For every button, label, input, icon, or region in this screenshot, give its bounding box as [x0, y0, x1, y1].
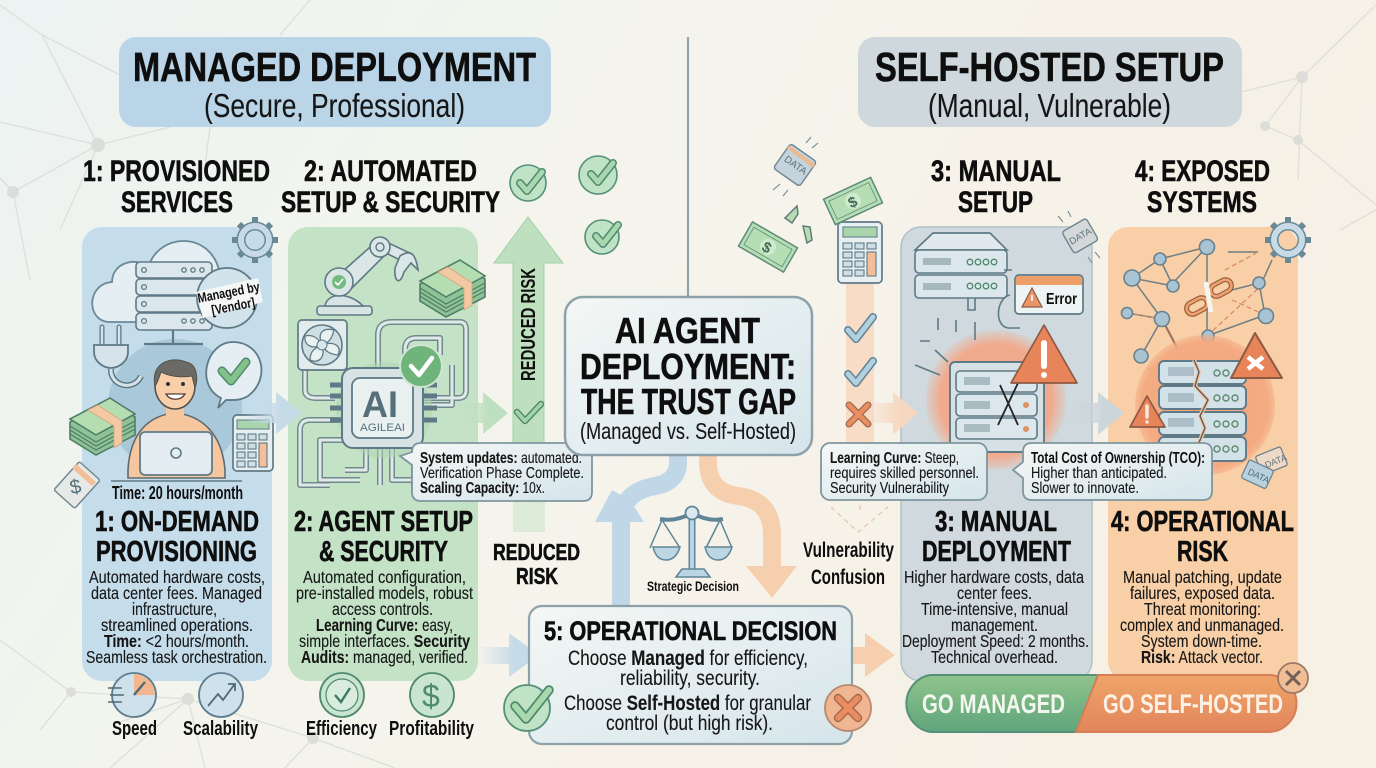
panel body text: pre-installed models, robust	[296, 583, 473, 603]
right header: self-hosted setup: SELF-HOSTED SETUP	[875, 44, 1224, 90]
callout: total cost of ownership	[1013, 443, 1212, 500]
dashed warning marks	[831, 505, 888, 532]
panel body text: infrastructure,	[132, 599, 217, 619]
panel body text: center fees.	[957, 583, 1032, 603]
curved arrow: to self-hosted	[708, 452, 797, 598]
icon: close cross	[1278, 663, 1308, 693]
badge: managed by vendor	[196, 268, 263, 328]
panel heading: operational risk	[1111, 506, 1294, 568]
panel heading: agent setup and security: 2: AGENT SETUP	[294, 506, 473, 538]
column heading 1	[83, 155, 270, 219]
panel body text: data center fees. Managed	[91, 583, 262, 603]
column heading 3: SETUP	[958, 186, 1033, 219]
label: vulnerability and confusion: Confusion	[811, 566, 885, 589]
icon: cash stack	[70, 398, 135, 455]
panel body text: Learning Curve: easy,	[316, 615, 453, 635]
column heading 1: 1: PROVISIONED	[83, 155, 270, 188]
label: reduced risk	[493, 539, 580, 589]
box: operational decision: reliability, security.	[620, 667, 760, 690]
box: operational decision: Choose Self-Hosted for granular	[564, 692, 811, 715]
callout: learning curve: requires skilled personnel.	[830, 465, 979, 482]
panel: operational risk	[1108, 217, 1311, 681]
column heading 3	[931, 155, 1061, 219]
icon: broken data chips: DATA	[1246, 467, 1271, 485]
icon: orange cross	[825, 685, 871, 731]
panel: agent setup and security	[288, 227, 485, 681]
panel heading: on-demand provisioning: 1: ON-DEMAND	[95, 506, 259, 538]
icon: speech bubble check	[206, 342, 261, 408]
panel body text: Manual patching, update	[1123, 567, 1282, 587]
panel body text	[902, 567, 1089, 667]
curved arrow: to managed	[595, 452, 678, 606]
illustration: cloud and server rack	[92, 241, 237, 344]
icon: calculator	[233, 415, 273, 471]
panel heading: on-demand provisioning: PROVISIONING	[96, 536, 257, 568]
box: operational decision: Choose Managed for efficiency,	[568, 647, 808, 670]
callout: system updates	[400, 443, 592, 501]
callout: total cost of ownership: Total Cost of Ownership (TCO):	[1031, 450, 1205, 467]
icon: gear	[1265, 217, 1311, 263]
callout: total cost of ownership: Slower to innovate.	[1031, 480, 1139, 497]
column heading 4: SYSTEMS	[1147, 186, 1257, 219]
panel body text: System down-time.	[1141, 631, 1262, 651]
panel body text: Seamless task orchestration.	[86, 647, 267, 667]
arrow: provisioning to setup	[245, 392, 302, 434]
panel heading: agent setup and security	[294, 506, 473, 568]
arrow: reduced risk rising: REDUCED RISK	[518, 268, 540, 381]
panel body text: Higher hardware costs, data	[904, 567, 1084, 587]
illustration: server with error	[915, 233, 1020, 328]
panel body text: Automated configuration,	[303, 567, 466, 587]
callout: learning curve	[821, 443, 987, 500]
left header: managed deployment: MANAGED DEPLOYMENT	[133, 44, 536, 90]
label: reduced risk: RISK	[516, 563, 558, 589]
callout: system updates: System updates: automated.	[420, 450, 582, 467]
panel body text	[1120, 567, 1284, 667]
box: operational decision	[504, 606, 871, 744]
callout: total cost of ownership: Higher than anticipated.	[1031, 465, 1167, 482]
arrow: setup to reduced risk	[455, 392, 508, 434]
panel heading: agent setup and security: & SECURITY	[319, 536, 448, 568]
center title box: THE TRUST GAP	[581, 381, 796, 422]
error window: Error	[1046, 291, 1077, 308]
icon: broken data chips: DATA	[1263, 452, 1288, 470]
arrow: into manual setup	[872, 392, 918, 435]
metric: profitability	[389, 673, 475, 740]
icon: cooling fan	[298, 320, 347, 370]
icons: verified checks	[510, 156, 619, 254]
panel body text	[296, 567, 473, 667]
label: vulnerability and confusion	[803, 539, 894, 589]
arrow: decision to self-hosted	[850, 633, 895, 677]
callout: system updates: Scaling Capacity: 10x.	[420, 480, 545, 497]
panel body text: Technical overhead.	[931, 647, 1058, 667]
panel heading: operational risk: RISK	[1177, 536, 1228, 568]
caption: time per month: Time: 20 hours/month	[112, 483, 243, 503]
icon: scales of justice	[650, 506, 732, 577]
icon: dollar bill: $	[846, 193, 861, 212]
icon: AI chip	[330, 345, 442, 448]
arrow: manual to exposed	[1070, 392, 1124, 435]
icon: broken data chips	[1241, 446, 1288, 489]
icon: data chip: DATA	[782, 154, 809, 178]
panel: on-demand provisioning	[54, 217, 278, 681]
center title box: (Managed vs. Self-Hosted)	[580, 418, 796, 444]
center title box: AI AGENT	[615, 310, 760, 351]
panel body text: Audits: managed, verified.	[301, 647, 468, 667]
icon: dollar bill: $	[759, 238, 775, 258]
illustration: circuit traces	[300, 322, 466, 490]
label: strategic decision: Strategic Decision	[647, 578, 739, 594]
icon: calculator	[838, 222, 882, 283]
button: go managed or self-hosted: GO SELF-HOSTED	[1103, 689, 1283, 719]
button: go managed or self-hosted	[906, 663, 1308, 732]
column heading 4	[1135, 155, 1270, 219]
callout: system updates: Verification Phase Complete.	[420, 465, 584, 482]
icon: torn bill scraps	[785, 206, 812, 243]
panel heading: operational risk: 4: OPERATIONAL	[1111, 506, 1294, 538]
metric: speed: Speed	[112, 718, 157, 740]
right header: self-hosted setup	[858, 37, 1242, 127]
panel heading: manual deployment	[922, 506, 1071, 568]
metric: profitability: Profitability	[389, 718, 475, 740]
column heading 3: 3: MANUAL	[931, 155, 1061, 188]
panel body text	[86, 567, 267, 667]
panel heading: manual deployment: DEPLOYMENT	[922, 536, 1071, 568]
icon: data chip	[1058, 211, 1100, 263]
cracked server with warnings	[1130, 333, 1282, 475]
panel body text: failures, exposed data.	[1130, 583, 1275, 603]
panel body text: access controls.	[332, 599, 433, 619]
panel body text: Automated hardware costs,	[89, 567, 265, 587]
metric: scalability	[183, 673, 259, 740]
column heading 2	[281, 155, 500, 219]
center title box	[565, 297, 812, 455]
icon: data chip	[773, 137, 818, 196]
label: reduced risk: REDUCED	[493, 539, 580, 565]
icon: robot arm	[317, 237, 418, 315]
icon: dollar bill	[738, 222, 798, 272]
icon: dollar bill	[824, 177, 882, 225]
icon: AI chip: AGILEAI	[360, 422, 405, 434]
panel body text: Threat monitoring:	[1144, 599, 1261, 619]
icon: green check	[504, 685, 550, 731]
panel body text: Time: <2 hours/month.	[104, 631, 249, 651]
icon: torn receipt: $	[68, 475, 83, 499]
arrow: reduced risk rising	[494, 217, 563, 532]
panel body text: simple interfaces. Security	[299, 631, 470, 651]
icon: torn receipt	[54, 462, 100, 508]
column heading 2: SETUP & SECURITY	[281, 186, 500, 219]
panel heading: manual deployment: 3: MANUAL	[935, 506, 1057, 538]
icon: cash stack	[420, 260, 485, 317]
error window	[1015, 275, 1083, 314]
left header: managed deployment: (Secure, Professional)	[204, 87, 465, 124]
left header: managed deployment	[119, 37, 551, 127]
callout: learning curve: Security Vulnerability	[830, 480, 949, 497]
icon: gear	[232, 217, 278, 263]
panel heading: on-demand provisioning	[95, 506, 259, 568]
column heading 1: SERVICES	[121, 186, 233, 219]
badge: managed by vendor: Managed by	[196, 279, 261, 306]
column heading 4: 4: EXPOSED	[1135, 155, 1270, 188]
column heading 2: 2: AUTOMATED	[304, 155, 477, 188]
right decoration stripe with checks	[846, 283, 874, 443]
panel body text: complex and unmanaged.	[1120, 615, 1284, 635]
illustration: person at laptop	[111, 360, 242, 481]
label: vulnerability and confusion: Vulnerability	[803, 539, 894, 562]
panel body text: streamlined operations.	[101, 615, 253, 635]
box: operational decision: control (but high risk).	[606, 712, 773, 735]
icon: power plug	[94, 327, 141, 385]
metric: speed	[108, 673, 157, 740]
metric: scalability: Scalability	[183, 718, 259, 740]
icon: AI chip: AI	[362, 384, 398, 425]
callout: learning curve: Learning Curve: Steep,	[830, 450, 959, 467]
icon: data chip: DATA	[1067, 226, 1094, 248]
right header: self-hosted setup: (Manual, Vulnerable)	[928, 87, 1171, 124]
illustration: broken network	[1122, 240, 1274, 377]
metric: efficiency: Efficiency	[306, 718, 378, 740]
badge: managed by vendor: [Vendor]	[210, 295, 256, 318]
metric: efficiency	[306, 673, 378, 740]
panel body text: Time-intensive, manual	[921, 599, 1068, 619]
panel body text: management.	[951, 615, 1038, 635]
metric: profitability: $	[422, 678, 440, 714]
panel body text: Risk: Attack vector.	[1141, 647, 1263, 667]
panel: manual deployment	[901, 227, 1092, 681]
center title box: DEPLOYMENT:	[580, 346, 796, 387]
button: go managed or self-hosted: GO MANAGED	[922, 689, 1065, 719]
box: operational decision: 5: OPERATIONAL DECISION	[544, 616, 837, 646]
arrow: managed into decision	[478, 633, 539, 677]
broken server with warning	[915, 318, 1077, 470]
panel body text: Deployment Speed: 2 months.	[902, 631, 1089, 651]
